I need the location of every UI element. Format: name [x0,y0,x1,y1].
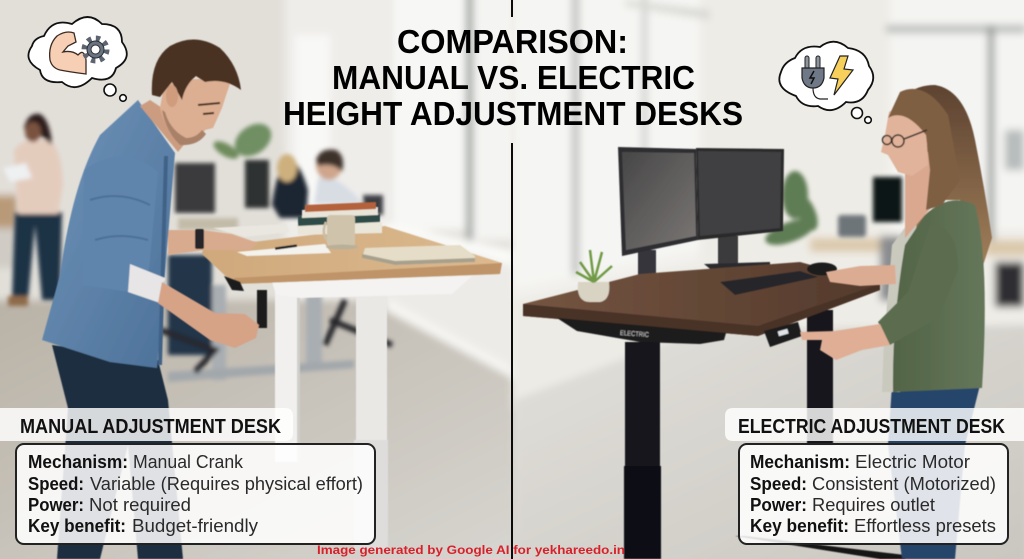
spec list: manual: Manual Crank [133,452,244,472]
papers and pen [213,224,331,256]
spec list: electric [739,444,1008,544]
electric desk [523,147,905,559]
floor foot [735,536,905,559]
back forearm on desk [168,230,258,255]
seated people and monitors [160,117,392,382]
background desk legs and chairs [160,255,392,382]
spec list: electric: Power: [750,495,807,515]
desk frame [272,276,472,298]
cloud [28,17,127,87]
crank handle [257,290,267,328]
glasses [882,130,927,147]
thought bubble: muscle and gear [28,17,127,101]
title: MANUAL VS. ELECTRIC [332,59,695,96]
neck [905,150,938,238]
icon: flexed arm [50,32,86,74]
desk crossbar [557,318,726,344]
notebooks [362,245,475,265]
spec list: electric: Requires outlet [812,495,935,515]
first monitor stand [617,250,696,291]
plant [762,171,823,250]
icon: gear [84,38,106,60]
desk top [202,226,502,284]
potted plant [576,250,612,302]
inner shirt [882,210,918,392]
hair back [888,85,992,290]
jeans [888,385,980,559]
rolled cuff [128,264,165,303]
spec list: manual: Power: [28,495,84,515]
brow and closed eye [198,103,220,114]
heading: electric adjustment desk [725,408,1024,441]
spec list: manual: Speed: [28,474,84,494]
spec list: electric: Effortless presets [854,516,996,536]
arm fold [82,156,158,292]
office background left [0,0,520,559]
title: COMPARISON: [397,23,628,60]
spec list: electric: Consistent (Motorized) [812,474,996,494]
keyboard [720,271,818,295]
coffee mug [324,215,358,250]
neck [140,100,196,152]
desk legs [275,292,388,550]
monitor left [618,147,698,256]
face [881,107,928,176]
bubble dots [104,84,126,101]
monitor [873,177,902,222]
spec list: electric: Electric Motor [855,452,970,472]
head [160,78,232,145]
heading: manual adjustment desk [0,408,293,441]
mouse [807,262,837,276]
photo panel: manual desk scene [0,0,520,559]
spec list: manual: Not required [89,495,191,515]
back leg [807,310,833,445]
background office items [762,171,902,250]
heading: manual adjustment desk: MANUAL ADJUSTMENT DESK [20,415,281,438]
torso shirt [42,100,175,368]
bubble dots [852,108,871,123]
control panel [764,322,802,347]
sleeve fold shadows [90,196,150,240]
desk phone [838,215,866,237]
placket [160,156,166,365]
woman standing [3,114,63,306]
upper arm and sleeve [878,225,958,345]
crank mount [224,276,244,291]
jeans [52,345,183,559]
cloud [779,42,873,110]
cardigan [893,200,985,392]
watch [195,229,204,249]
spec list: manual [16,444,375,544]
photo panel: electric desk scene [512,0,1024,559]
spec list: manual: Budget-friendly [132,516,258,536]
title [283,23,743,132]
hair [152,39,241,100]
front leg [624,342,661,559]
spec list: electric: Speed: [750,474,807,494]
center divider [511,0,513,559]
desk surface [523,262,880,336]
label on frame: ELECTRIC [620,330,649,339]
office background right [512,0,1024,559]
icon: plug [802,56,828,99]
stubble [162,110,206,145]
icon: lightning bolt [830,56,853,95]
watermark credit: Image generated by Google AI for yekhareedo.in [317,543,625,557]
panel: manual desk specs [0,408,375,544]
background colleagues [3,114,392,382]
stacked books [297,202,382,235]
second monitor stand [704,236,770,272]
spec list: electric: Key benefit: [750,516,849,536]
hand on control [800,324,890,360]
spec list: manual: Variable (Requires physical effort) [90,474,363,494]
hand on desk [826,265,896,286]
woman using electric desk [800,85,992,559]
manual desk [202,202,502,550]
hair front [888,89,960,210]
thought bubble: plug and lightning [779,42,873,123]
spec list: manual: Mechanism: [28,452,128,472]
panel: electric desk specs [725,408,1024,544]
monitor right [696,148,784,240]
crank forearm and hand [158,282,259,348]
ear [166,85,178,107]
man cranking desk [42,39,267,559]
title: HEIGHT ADJUSTMENT DESKS [283,95,743,132]
spec list: electric: Mechanism: [750,452,850,472]
spec list: manual: Key benefit: [28,516,126,536]
